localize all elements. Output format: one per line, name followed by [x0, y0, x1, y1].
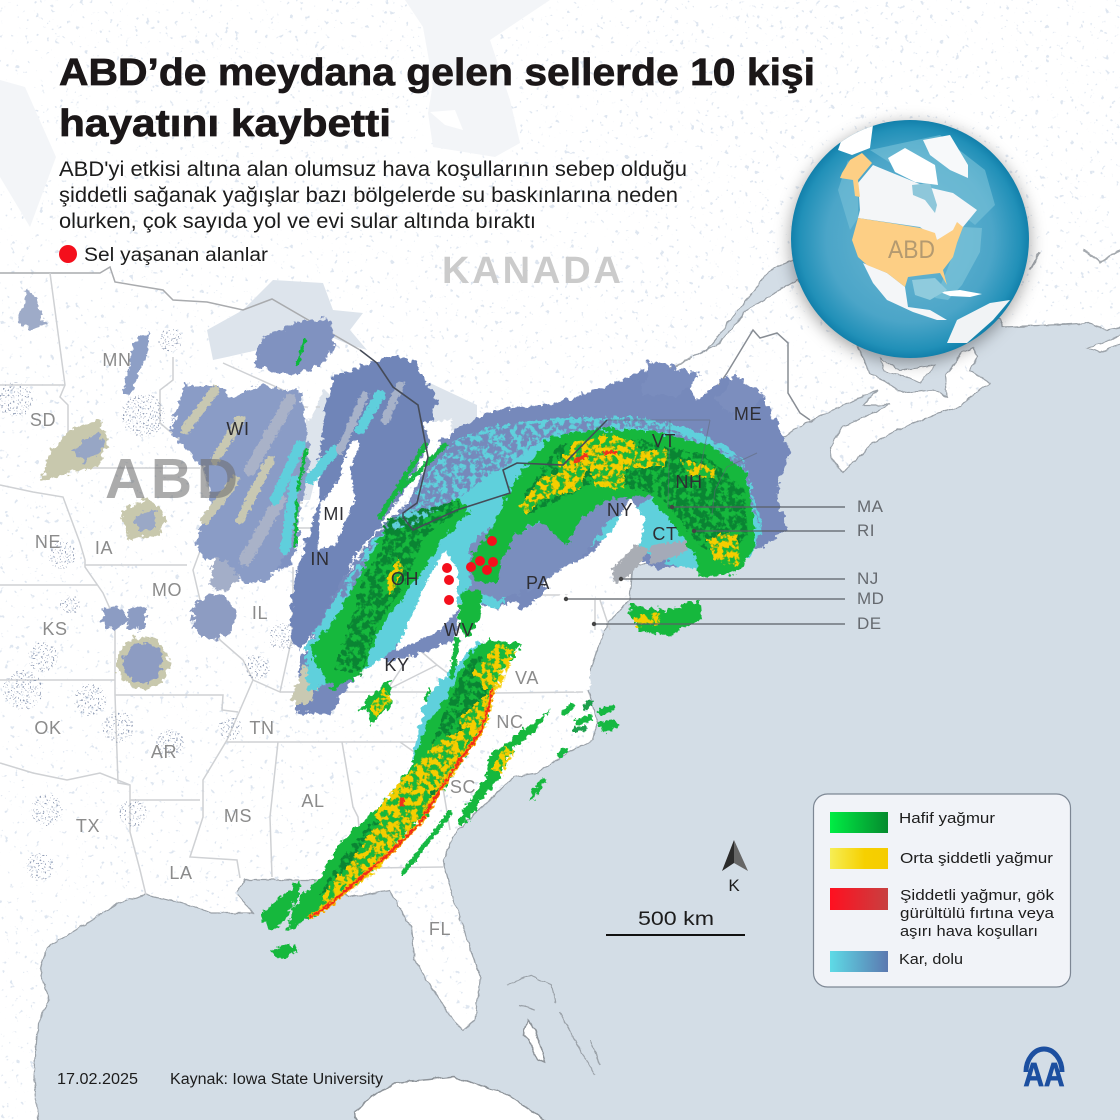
legend item: light rain — [830, 811, 995, 833]
state labels — [30, 350, 762, 939]
legend item: moderate rain: Orta şiddetli yağmur — [900, 851, 1053, 867]
state labels: VA — [515, 668, 539, 688]
state labels: KY — [384, 655, 410, 675]
state labels: WI — [226, 419, 250, 439]
scale bar: 500 km — [638, 909, 714, 930]
flood location markers — [442, 536, 498, 605]
subtitle paragraph: ABD'yi etkisi altına alan olumsuz hava koşullarının sebep olduğu — [59, 158, 687, 181]
state labels: CT — [652, 524, 678, 544]
small state labels at leader ends: MD — [857, 589, 884, 608]
state labels: SC — [450, 777, 476, 797]
state labels: PA — [526, 573, 550, 593]
radar: light rain, green mass — [260, 430, 755, 958]
state labels: MN — [102, 350, 132, 370]
state labels: OH — [391, 569, 419, 589]
state labels: NY — [607, 500, 633, 520]
north arrow: K — [728, 876, 740, 895]
title: ABD’de meydana gelen sellerde 10 kişi — [59, 52, 815, 94]
state labels: FL — [429, 919, 451, 939]
state labels: MI — [323, 504, 345, 524]
subtitle paragraph: olurken, çok sayıda yol ve evi sular altında bıraktı — [59, 210, 536, 233]
legend item: severe weather: Şiddetli yağmur, gök — [900, 888, 1055, 904]
state labels: IA — [95, 538, 113, 558]
state labels: WV — [444, 620, 474, 640]
white gaps in radar coverage — [318, 420, 700, 690]
state labels: IL — [252, 603, 268, 623]
legend item: severe weather — [830, 888, 1055, 940]
radar: light snow and cyan fringe — [305, 418, 762, 800]
small state labels at leader ends — [857, 497, 884, 633]
radar: heavy rain, red and orange line — [310, 453, 615, 917]
state labels: LA — [169, 863, 193, 883]
subtitle paragraph: şiddetli sağanak yağışlar bazı bölgelerde su baskınlarına neden — [59, 184, 678, 207]
globe inset: ABD — [888, 236, 935, 264]
state labels: NC — [496, 712, 524, 732]
state labels: SD — [30, 410, 56, 430]
state labels: MO — [152, 580, 182, 600]
state and national borders — [0, 267, 810, 895]
flood legend key: Sel yaşanan alanlar — [84, 245, 269, 266]
source: Kaynak: Iowa State University — [170, 1071, 383, 1088]
logo: Anadolu Agency: AA — [1024, 1056, 1064, 1093]
state labels: KS — [42, 619, 68, 639]
radar: darker rain core — [320, 440, 748, 895]
radar: thin rain streaks and offshore cells — [360, 445, 615, 873]
state labels: AR — [151, 742, 177, 762]
dark shoreline over radar — [360, 350, 757, 530]
state labels: NE — [35, 532, 61, 552]
legend item: light rain: Hafif yağmur — [899, 811, 995, 827]
state labels: TX — [76, 816, 100, 836]
globe inset — [790, 120, 1030, 363]
country label: ABD: ABD — [105, 447, 238, 511]
small state labels at leader ends: NJ — [857, 569, 879, 588]
leader lines for small states — [564, 505, 845, 626]
radar: blue-grey mottling over the cyan fringe — [340, 418, 762, 625]
title: hayatını kaybetti — [59, 103, 391, 145]
legend item: moderate rain — [830, 848, 1053, 869]
legend item: snow and hail — [830, 951, 963, 972]
state labels: AL — [301, 791, 325, 811]
title — [59, 52, 815, 145]
state labels: OK — [34, 718, 62, 738]
date: 17.02.2025 — [57, 1071, 138, 1088]
radar: scattered ground clutter clusters — [0, 328, 297, 881]
legend item: snow and hail: Kar, dolu — [899, 952, 963, 968]
small state labels at leader ends: MA — [857, 497, 884, 516]
state labels: MS — [224, 806, 252, 826]
state labels: IN — [310, 549, 330, 569]
north arrow — [722, 840, 748, 895]
scale bar — [606, 909, 745, 936]
country label: KANADA: KANADA — [442, 250, 621, 292]
small state labels at leader ends: RI — [857, 521, 875, 540]
state labels: VT — [652, 431, 676, 451]
legend item: severe weather: aşırı hava koşulları — [900, 924, 1038, 940]
radar: snow and ice band — [18, 290, 790, 715]
radar: moderate rain, yellow cores — [318, 434, 740, 910]
small state labels at leader ends: DE — [857, 614, 882, 633]
subtitle paragraph — [59, 158, 687, 233]
state labels: NH — [675, 472, 703, 492]
state labels: ME — [734, 404, 762, 424]
state labels: TN — [249, 718, 275, 738]
map legend panel — [814, 794, 1070, 987]
legend item: severe weather: gürültülü fırtına veya — [900, 906, 1055, 922]
